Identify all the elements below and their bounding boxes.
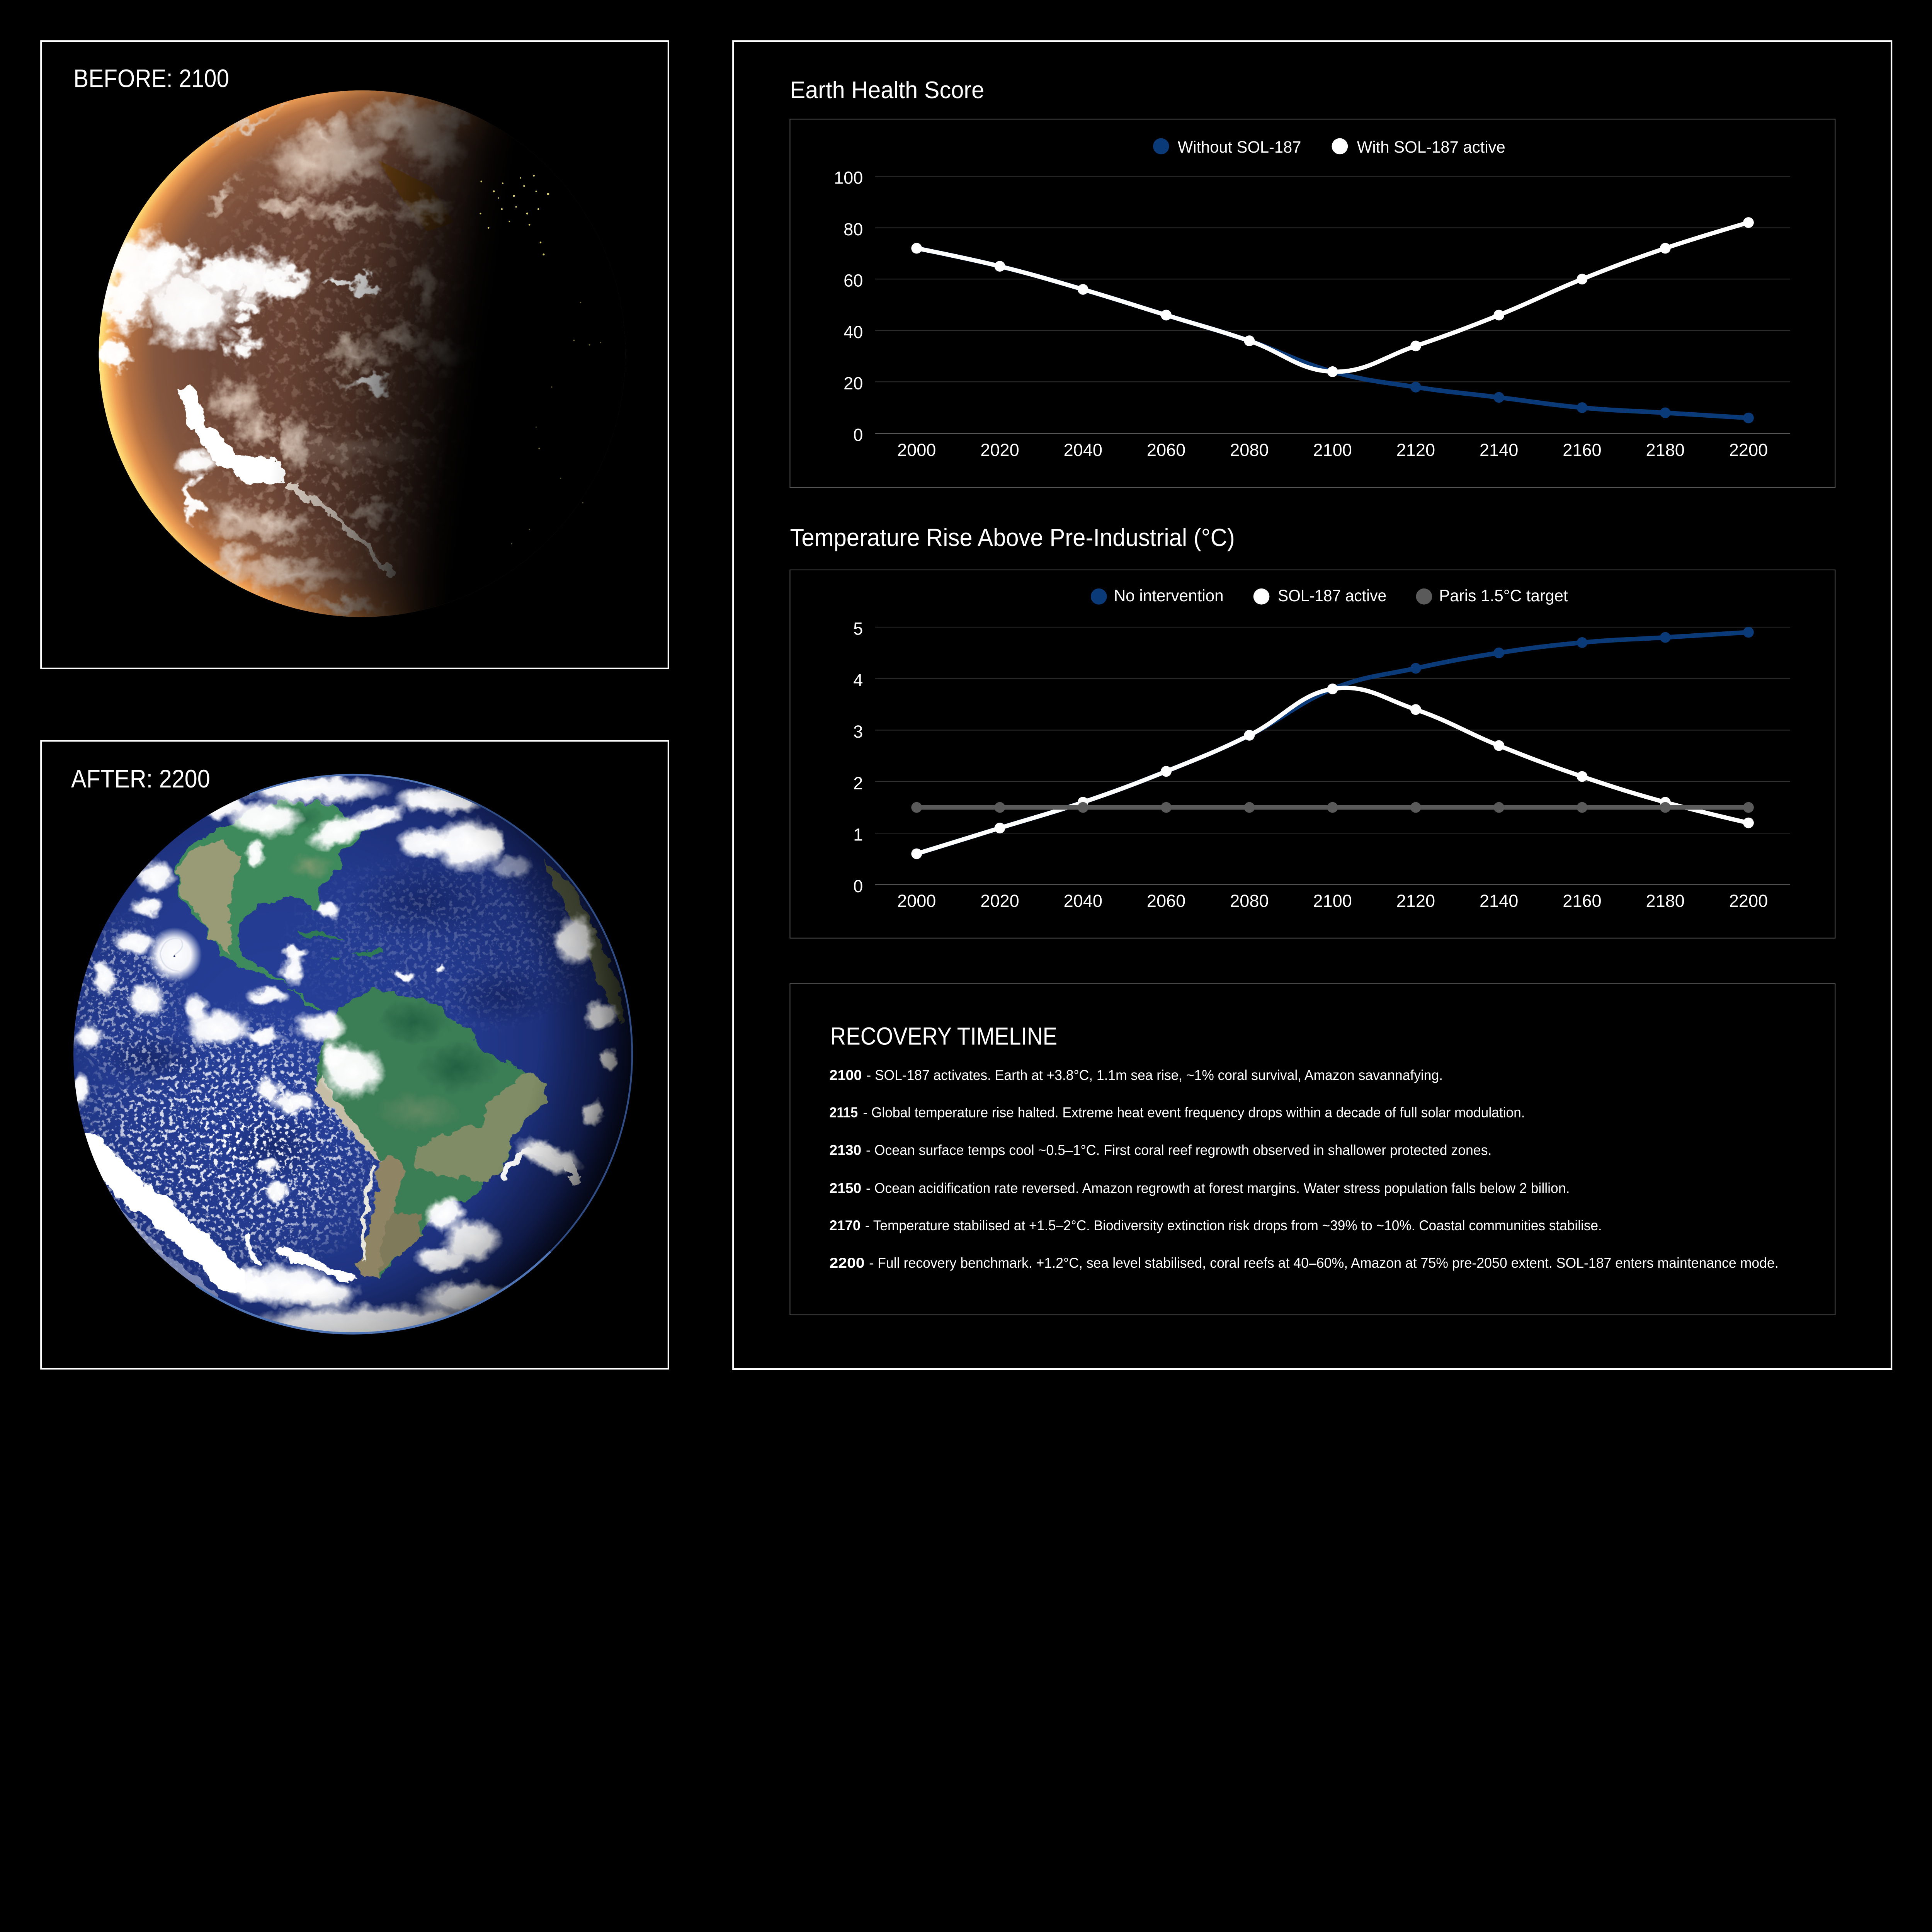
x axis labels: 2140 xyxy=(1480,891,1518,911)
x axis labels: 2100 xyxy=(1313,440,1352,460)
heading: Earth Health Score: Earth Health Score xyxy=(790,77,984,104)
legend: health chart: With SOL-187 active xyxy=(1357,138,1505,156)
x axis labels: 2160 xyxy=(1563,891,1602,911)
legend: temperature chart xyxy=(1091,587,1568,605)
line: no intervention xyxy=(911,627,1754,859)
x axis labels: 2000 xyxy=(897,891,936,911)
x axis labels: 2140 xyxy=(1480,440,1518,460)
x axis labels xyxy=(897,440,1768,460)
x axis labels: 2040 xyxy=(1064,891,1102,911)
line: with SOL-187 active xyxy=(911,217,1754,377)
panel: after 2200 xyxy=(41,741,668,1369)
y axis labels: 80 xyxy=(844,219,863,239)
x axis labels: 2200 xyxy=(1729,440,1768,460)
city lights on the night side xyxy=(480,175,601,544)
x axis labels: 2080 xyxy=(1230,440,1269,460)
x axis labels: 2020 xyxy=(980,440,1019,460)
line: without SOL-187 xyxy=(911,243,1754,423)
x axis labels: 2040 xyxy=(1064,440,1102,460)
x axis labels: 2180 xyxy=(1646,891,1685,911)
planet: scorched Earth in 2100 xyxy=(89,85,641,627)
y axis labels: 4 xyxy=(853,670,863,690)
x axis labels: 2160 xyxy=(1563,440,1602,460)
y axis labels: 0 xyxy=(853,425,863,445)
timeline entry 2150: - Ocean acidification rate reversed. Amazon regrowth at forest margins. Water stress population falls below 2 billion. xyxy=(866,1180,1570,1196)
heading: recovery timeline: RECOVERY TIMELINE xyxy=(830,1022,1057,1050)
y axis labels: 2 xyxy=(853,773,863,793)
timeline entry 2130: 2130 xyxy=(830,1142,861,1158)
panel: recovery timeline xyxy=(790,984,1835,1315)
atmosphere rim xyxy=(196,775,632,1333)
y axis labels: 60 xyxy=(844,271,863,291)
legend: health chart xyxy=(1153,138,1505,156)
x axis labels: 2120 xyxy=(1396,440,1435,460)
timeline entry 2200: 2200 xyxy=(830,1255,865,1271)
line: SOL-187 active xyxy=(911,684,1754,859)
x axis labels: 2020 xyxy=(980,891,1019,911)
planet: recovered Earth in 2200 xyxy=(67,769,641,1352)
y axis labels xyxy=(853,619,863,896)
x axis labels: 2120 xyxy=(1396,891,1435,911)
chart: Earth Health Score xyxy=(790,119,1835,488)
cyclone xyxy=(147,927,202,983)
x axis labels: 2000 xyxy=(897,440,936,460)
x axis labels: 2060 xyxy=(1147,440,1185,460)
page background xyxy=(0,0,1932,1409)
timeline entry 2150: 2150 xyxy=(830,1180,861,1196)
timeline entry 2100: - SOL-187 activates. Earth at +3.8°C, 1.1m sea rise, ~1% coral survival, Amazon savannafying. xyxy=(866,1067,1443,1083)
x axis labels: 2100 xyxy=(1313,891,1352,911)
x axis labels: 2060 xyxy=(1147,891,1185,911)
x axis labels: 2180 xyxy=(1646,440,1685,460)
scattered fine clouds xyxy=(73,857,585,1281)
timeline entry 2115: 2115 xyxy=(830,1104,858,1121)
x axis labels xyxy=(897,891,1768,911)
label: before 2100: BEFORE: 2100 xyxy=(73,64,229,93)
label: after 2200: AFTER: 2200 xyxy=(71,764,210,793)
legend: temperature chart: SOL-187 active xyxy=(1278,587,1386,605)
panel: before 2100 xyxy=(41,41,668,668)
timeline entry 2170: 2170 xyxy=(830,1217,861,1233)
y axis labels: 40 xyxy=(844,322,863,342)
y axis labels: 1 xyxy=(853,825,863,845)
y axis labels: 3 xyxy=(853,722,863,742)
timeline entry 2130: - Ocean surface temps cool ~0.5–1°C. First coral reef regrowth observed in shallower protected zones. xyxy=(866,1142,1492,1158)
panel: data column xyxy=(733,41,1891,1369)
timeline entry 2170: - Temperature stabilised at +1.5–2°C. Biodiversity extinction risk drops from ~39% to ~10%. Coastal communities stabilise. xyxy=(865,1217,1602,1233)
timeline entry 2100: 2100 xyxy=(830,1067,862,1083)
y axis labels xyxy=(834,168,863,445)
legend: temperature chart: No intervention xyxy=(1114,587,1224,605)
y axis labels: 100 xyxy=(834,168,863,188)
x axis labels: 2200 xyxy=(1729,891,1768,911)
timeline entry 2200: - Full recovery benchmark. +1.2°C, sea level stabilised, coral reefs at 40–60%, Amazon at 75% pre-2050 extent. SOL-187 enters maintenance mode. xyxy=(869,1255,1779,1271)
timeline entry 2115: - Global temperature rise halted. Extreme heat event frequency drops within a decade of full solar modulation. xyxy=(863,1104,1525,1121)
heading: Temperature Rise: Temperature Rise Above Pre-Industrial (°C) xyxy=(790,524,1235,551)
continents xyxy=(176,798,624,1278)
legend: health chart: Without SOL-187 xyxy=(1178,138,1301,156)
line: Paris 1.5°C target xyxy=(911,802,1754,813)
cloud systems xyxy=(70,774,620,1352)
y axis labels: 0 xyxy=(853,876,863,896)
chart: Temperature Rise xyxy=(790,570,1835,938)
y axis labels: 20 xyxy=(844,374,863,393)
x axis labels: 2080 xyxy=(1230,891,1269,911)
legend: temperature chart: Paris 1.5°C target xyxy=(1439,587,1568,605)
y axis labels: 5 xyxy=(853,619,863,638)
